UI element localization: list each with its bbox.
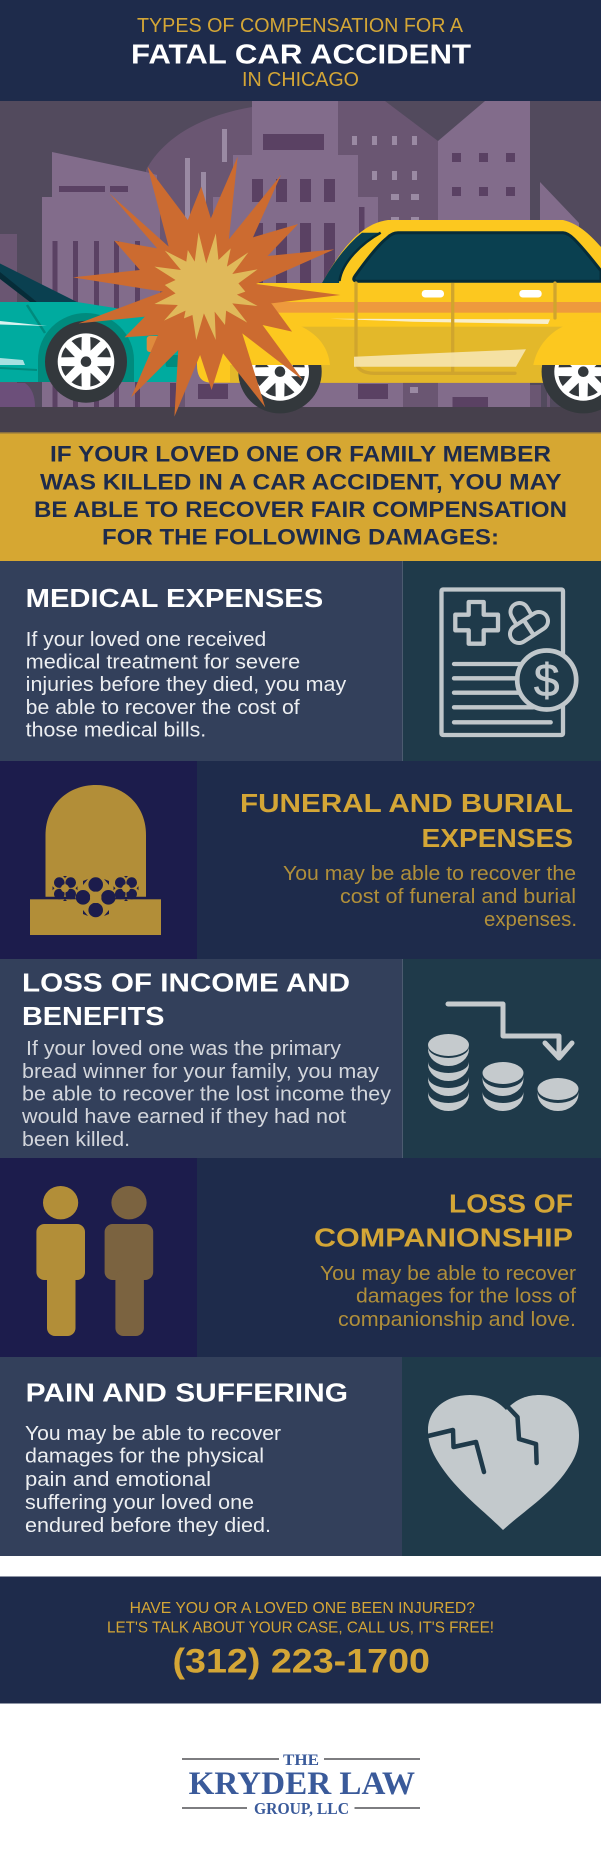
body text [21, 1038, 391, 1151]
main window [354, 233, 601, 281]
body text: would have earned if they had not [21, 1106, 346, 1128]
call to action text [107, 1600, 494, 1637]
panel: call to action [0, 1576, 601, 1704]
yellow car wheels [238, 365, 601, 414]
intro text: FOR THE FOLLOWING DAMAGES: [102, 524, 499, 550]
heading: LOSS OF INCOME AND [22, 968, 350, 998]
body text: companionship and love. [338, 1309, 576, 1331]
yellow car [197, 220, 601, 413]
title line 3: IN CHICAGO [242, 69, 359, 91]
call to action text: HAVE YOU OR A LOVED ONE BEEN INJURED? [130, 1600, 475, 1617]
body text: If your loved one was the primary [26, 1038, 341, 1060]
panel: funeral and burial expenses [0, 761, 601, 959]
logo: GROUP, LLC [254, 1799, 349, 1818]
body text: be able to recover the cost of [26, 697, 300, 719]
logo: THE [283, 1752, 319, 1769]
icon: two people [36, 1186, 153, 1336]
icon: medical bill: $ [534, 654, 559, 706]
panel: loss of income and benefits [0, 959, 601, 1158]
body text [26, 629, 346, 742]
city skyline [0, 101, 579, 407]
panel: pain and suffering [0, 1357, 601, 1556]
body text: You may be able to recover the [283, 863, 576, 885]
heading [314, 1189, 573, 1253]
panel: medical expenses [0, 561, 601, 761]
heading: PAIN AND SUFFERING [26, 1378, 348, 1408]
teal car wheel [45, 321, 127, 403]
heading: FUNERAL AND BURIAL [240, 788, 573, 818]
body text: suffering your loved one [25, 1492, 254, 1514]
lower body shade [230, 327, 601, 383]
call to action text: LET'S TALK ABOUT YOUR CASE, CALL US, IT'S FREE! [107, 1620, 494, 1637]
body text: medical treatment for severe [26, 652, 300, 674]
front side window [322, 233, 381, 283]
body text: damages for the loss of [356, 1286, 576, 1308]
heading: EXPENSES [422, 823, 573, 853]
explosion [73, 157, 340, 417]
body text: bread winner for your family, you may [22, 1061, 379, 1083]
body text: You may be able to recover [25, 1423, 281, 1445]
body text: pain and emotional [25, 1469, 211, 1491]
panel: loss of companionship [0, 1158, 601, 1357]
body text: endured before they died. [25, 1515, 271, 1537]
road [0, 407, 601, 432]
title line 2: FATAL CAR ACCIDENT [131, 38, 471, 70]
teal car [0, 264, 179, 403]
body text [283, 863, 577, 931]
body text: be able to recover the lost income they [22, 1084, 391, 1106]
body text [25, 1423, 281, 1537]
panel: gold intro [0, 432, 601, 562]
body text: damages for the physical [25, 1446, 264, 1468]
body text [320, 1263, 576, 1331]
heading [22, 968, 350, 1031]
body text: injuries before they died, you may [26, 674, 346, 696]
icon: tombstone [30, 785, 161, 935]
phone number: (312) 223-1700 [172, 1643, 430, 1681]
body text: cost of funeral and burial [340, 886, 576, 908]
intro text: BE ABLE TO RECOVER FAIR COMPENSATION [34, 497, 567, 522]
icon: broken heart [428, 1395, 579, 1530]
panel: header [0, 0, 601, 101]
intro text: WAS KILLED IN A CAR ACCIDENT, YOU MAY [40, 470, 562, 494]
body text: been killed. [22, 1129, 130, 1151]
panel: crash illustration [0, 101, 601, 432]
logo [182, 1752, 420, 1818]
icon: declining coin stacks [428, 1004, 578, 1111]
heading [240, 788, 573, 853]
body text: expenses. [484, 909, 577, 931]
body text: If your loved one received [26, 629, 266, 651]
heading: LOSS OF [449, 1189, 573, 1219]
intro text [34, 442, 567, 550]
body text: You may be able to recover [320, 1263, 576, 1285]
title line 1: TYPES OF COMPENSATION FOR A [137, 15, 464, 37]
heading: COMPANIONSHIP [314, 1223, 573, 1253]
logo: KRYDER LAW [189, 1766, 415, 1802]
heading: BENEFITS [22, 1001, 164, 1031]
body text: those medical bills. [26, 720, 206, 742]
icon: medical bill [442, 590, 576, 735]
intro text: IF YOUR LOVED ONE OR FAMILY MEMBER [50, 442, 551, 466]
heading: MEDICAL EXPENSES [26, 583, 323, 613]
